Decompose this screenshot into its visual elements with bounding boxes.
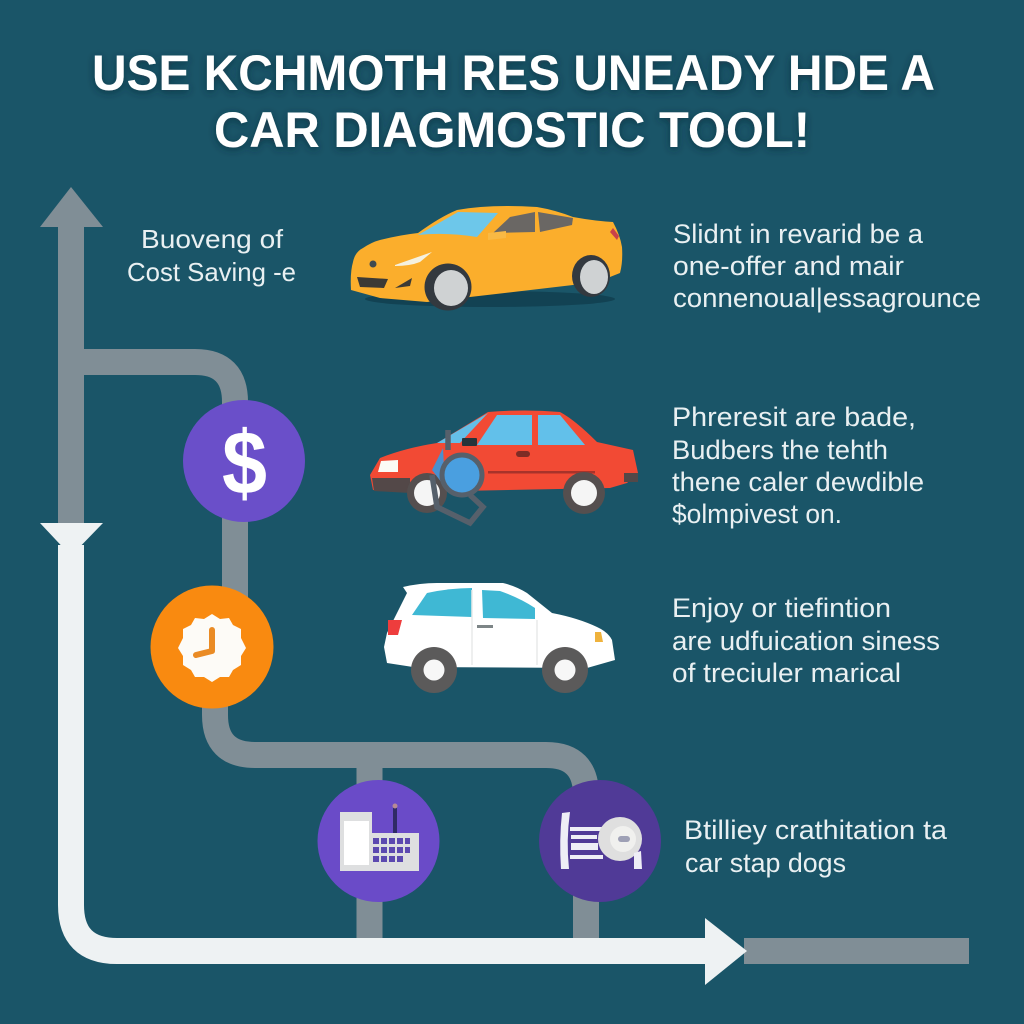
text: block four	[684, 815, 948, 878]
icon: scanner device circle	[318, 780, 440, 902]
text: block one: one-offer and mair	[673, 251, 904, 281]
text: block three: of treciuler marical	[672, 658, 901, 688]
icon: clock circle	[150, 586, 274, 708]
text: block one	[673, 219, 981, 313]
gray lower connector path	[215, 695, 586, 940]
white car	[384, 583, 615, 693]
title: USE KCHMOTH RES UNEADY HDE A	[92, 45, 935, 101]
text: block four: car stap dogs	[685, 848, 846, 878]
icon: dollar circle	[183, 400, 305, 522]
text: block two: $olmpivest on.	[672, 499, 842, 529]
text: block three	[672, 593, 940, 688]
text: block two: Budbers the tehth	[672, 435, 888, 465]
text: block three: are udfuication siness	[672, 626, 940, 656]
gray up arrow with branch path	[40, 187, 235, 600]
text: cost saving: Cost Saving -e	[127, 257, 296, 287]
title	[92, 45, 935, 158]
white down and right arrow	[40, 523, 747, 985]
gray exit line	[744, 938, 969, 964]
yellow car	[351, 206, 622, 310]
red car with magnifier	[370, 410, 638, 523]
text: block two	[672, 402, 924, 529]
text: block three: Enjoy or tiefintion	[672, 593, 891, 623]
text: block two: Phreresit are bade,	[672, 402, 916, 432]
icon: dollar circle: $	[222, 414, 267, 514]
text: block four: Btilliey crathitation ta	[684, 815, 948, 845]
text: cost saving: Buoveng of	[141, 224, 284, 254]
text: cost saving	[127, 224, 296, 287]
text: block one: connenoual|essagrounce	[673, 283, 981, 313]
icon: gauge circle	[539, 780, 661, 902]
title: CAR DIAGMOSTIC TOOL!	[214, 102, 810, 158]
text: block two: thene caler dewdible	[672, 467, 924, 497]
text: block one: Slidnt in revarid be a	[673, 219, 924, 249]
